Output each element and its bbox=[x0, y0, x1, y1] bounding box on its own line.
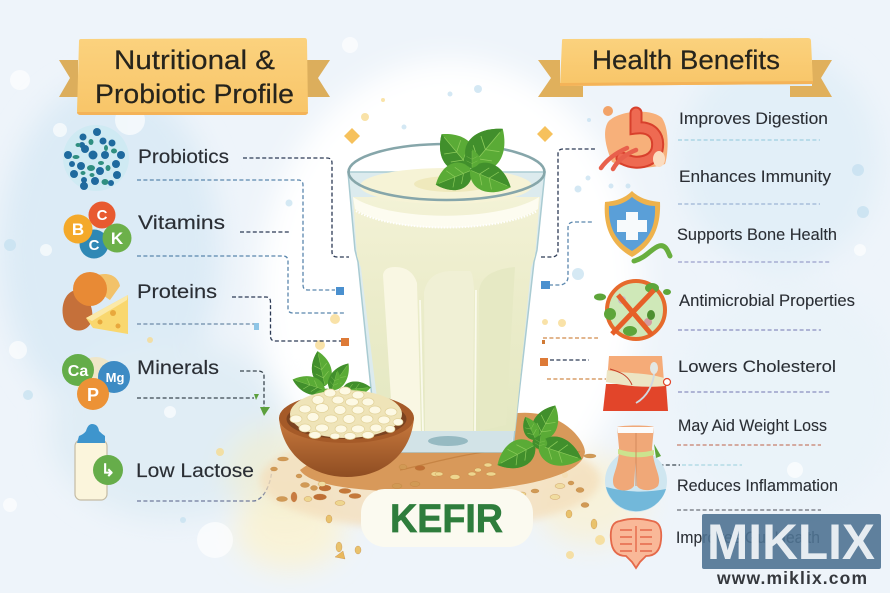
icon: vitamins: C bbox=[89, 237, 100, 254]
title: KEFIR: KEFIR bbox=[390, 497, 503, 541]
seeds bbox=[270, 454, 597, 559]
kefir grains bbox=[290, 387, 403, 440]
connector lines: right bbox=[540, 140, 831, 510]
label: proteins: Proteins bbox=[137, 281, 217, 303]
label: antimicrobial properties: Antimicrobial Properties bbox=[679, 292, 855, 310]
icon: vitamins bbox=[64, 202, 132, 258]
glass base bbox=[381, 431, 514, 452]
label: lowers cholesterol: Lowers Cholesterol bbox=[678, 358, 836, 376]
icon: feet bbox=[605, 426, 667, 512]
icon: vitamins: B bbox=[72, 220, 84, 239]
connector lines: left bbox=[137, 158, 349, 501]
plate mint bbox=[491, 400, 586, 477]
heading banner: nutritional and probiotic profile bbox=[59, 38, 330, 115]
heading banner: nutritional and probiotic profile: Nutritional & bbox=[114, 45, 275, 75]
label: improves gut health: Improves Gut Health bbox=[676, 529, 820, 547]
icon: minerals: P bbox=[87, 385, 99, 405]
label: reduces inflammation: Reduces Inflammation bbox=[677, 477, 838, 495]
icon: shield bbox=[605, 191, 670, 261]
title: KEFIR bbox=[361, 489, 533, 547]
icon: minerals: Ca bbox=[68, 363, 88, 380]
heading banner: health benefits bbox=[538, 38, 832, 97]
icon: probiotics bbox=[63, 125, 129, 191]
glass rim bbox=[348, 144, 544, 200]
icon: minerals: Mg bbox=[106, 370, 124, 385]
wooden board bbox=[260, 413, 600, 530]
watermark: miklix: www.miklix.com bbox=[716, 568, 867, 588]
icon: low lactose bottle: ↳ bbox=[101, 461, 115, 480]
label: low lactose: Low Lactose bbox=[136, 460, 254, 482]
glass bbox=[348, 144, 545, 452]
icon: stomach bbox=[601, 106, 668, 169]
label: minerals: Minerals bbox=[137, 357, 219, 379]
watermark: miklix: MIKLIX bbox=[707, 514, 875, 570]
icon: gut bbox=[611, 519, 661, 568]
label: enhances immunity: Enhances Immunity bbox=[679, 168, 832, 186]
illustration: kefir glass and bowl bbox=[260, 117, 600, 559]
label: improves digestion: Improves Digestion bbox=[679, 110, 828, 128]
label: may aid weight loss: May Aid Weight Loss bbox=[678, 417, 827, 435]
panel: health benefits bbox=[538, 38, 855, 568]
icon: proteins bbox=[62, 272, 128, 334]
icon: vitamins: C bbox=[97, 207, 108, 224]
heading banner: nutritional and probiotic profile: Probiotic Profile bbox=[95, 79, 294, 109]
decorative diamonds bbox=[344, 126, 553, 144]
panel: nutritional and probiotic profile bbox=[59, 38, 330, 500]
icon: low lactose bottle bbox=[75, 424, 123, 500]
label: supports bone health: Supports Bone Health bbox=[677, 226, 837, 244]
icon: lowers cholesterol bbox=[603, 356, 670, 411]
fluted panels bbox=[383, 267, 421, 431]
icon: antimicrobial bbox=[594, 281, 671, 339]
icon: minerals bbox=[62, 354, 130, 410]
icon: vitamins: K bbox=[111, 229, 124, 248]
bowl of kefir grains bbox=[279, 349, 414, 477]
heading banner: health benefits: Health Benefits bbox=[592, 45, 780, 75]
label: probiotics: Probiotics bbox=[138, 146, 229, 168]
bowl mint bbox=[290, 349, 371, 412]
mint garnish bbox=[429, 117, 517, 200]
label: vitamins: Vitamins bbox=[138, 212, 225, 234]
milk bbox=[353, 197, 540, 431]
